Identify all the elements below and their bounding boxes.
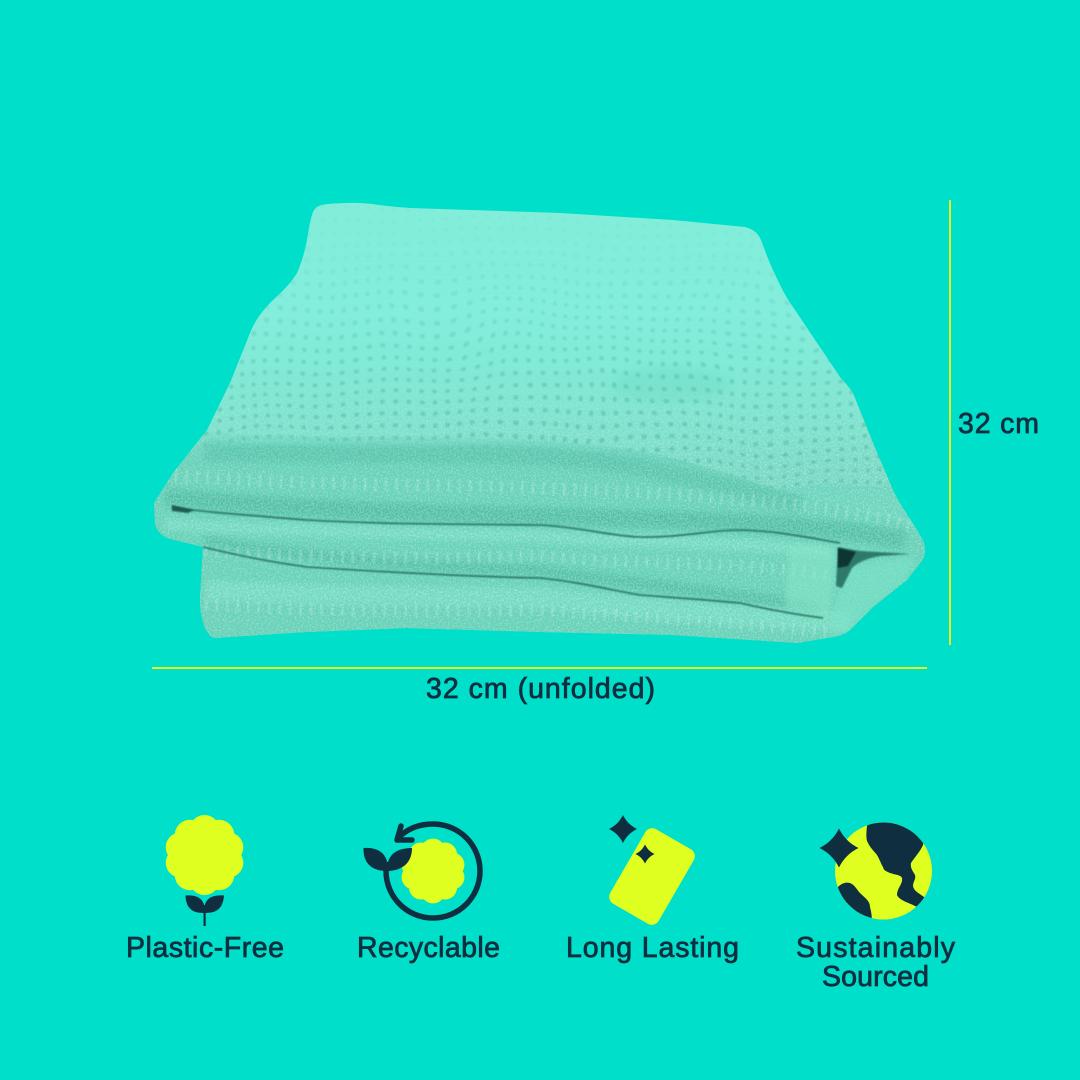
fold line upper	[172, 507, 840, 543]
dark gap inside fold	[836, 547, 911, 588]
label: sustainably sourced: Sustainably	[796, 932, 956, 964]
height dimension line	[949, 200, 951, 645]
feature: sustainably sourced	[796, 815, 956, 993]
label: sustainably sourced	[796, 932, 956, 993]
icon: globe with sparkle	[820, 822, 932, 920]
band shading: light top of second fold	[165, 524, 830, 552]
fold line lower	[203, 547, 823, 618]
front fold band	[154, 435, 925, 643]
label: plastic-free: Plastic-Free	[126, 932, 284, 964]
fine fibre noise	[154, 391, 925, 643]
icon: cloth card with sparkles	[606, 815, 698, 928]
lower right wrap	[832, 558, 912, 632]
label: recyclable: Recyclable	[357, 932, 500, 964]
feature: plastic-free	[126, 815, 284, 964]
label: long lasting: Long Lasting	[566, 932, 739, 964]
band shading: shadow above first fold	[165, 497, 905, 540]
icon: cotton flower with sprout	[166, 815, 243, 926]
band shading: shadow above second fold line	[205, 541, 820, 610]
label: sustainably sourced: Sourced	[822, 961, 929, 993]
band shading: shaded top of fold band	[205, 452, 800, 505]
ribbed weave rows	[175, 475, 910, 632]
rolled end of middle fold	[785, 545, 836, 617]
height label: 32 cm	[958, 408, 1039, 440]
icon: flower in recycling loop with leaves	[363, 824, 480, 918]
soft shadow patch on top surface	[622, 375, 718, 395]
waffle texture on top surface	[190, 276, 891, 490]
feature: long lasting	[566, 815, 739, 964]
band shading: light bottom fold	[205, 590, 850, 622]
feature: recyclable	[357, 824, 500, 964]
width label: 32 cm (unfolded)	[426, 673, 655, 705]
folded towel photo	[154, 202, 925, 643]
width dimension line	[152, 667, 927, 669]
